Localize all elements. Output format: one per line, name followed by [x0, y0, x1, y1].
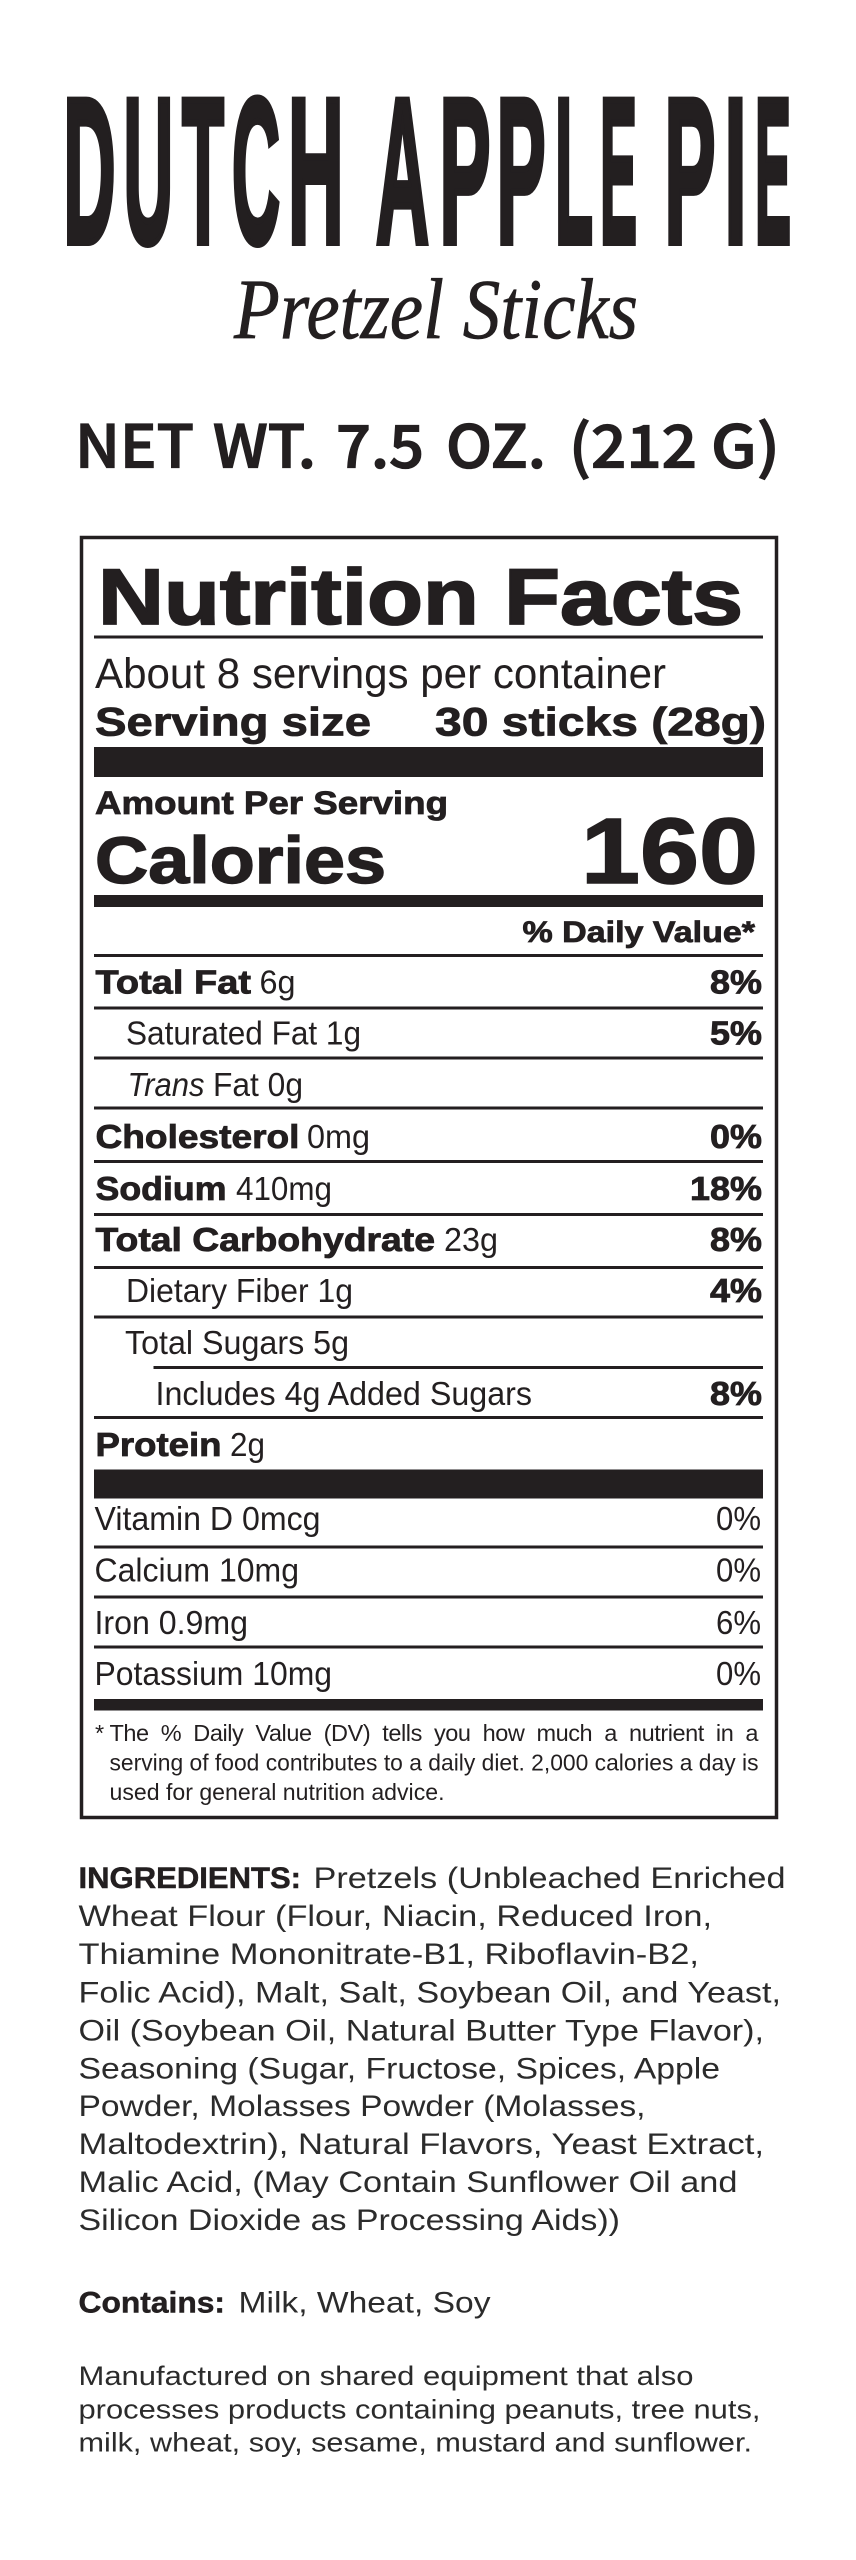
row: vitamin d: [94, 1500, 761, 1537]
footnote: serving of food contributes to a daily diet. 2,000 calories a day is: [110, 1750, 758, 1776]
row: iron: [94, 1604, 761, 1641]
contains allergens: Contains:: [78, 2286, 225, 2320]
row: saturated fat: Saturated Fat 1g: [126, 1014, 361, 1052]
row: iron: Iron 0.9mg: [94, 1604, 248, 1641]
ingredients: Seasoning (Sugar, Fructose, Spices, Apple: [78, 2052, 720, 2086]
net weight: G): [711, 400, 780, 484]
subtitle: Pretzel Sticks: Pretzel Sticks: [233, 261, 638, 357]
row: added sugars: [156, 1375, 762, 1412]
title: Dutch Apple Pie: A: [376, 56, 429, 286]
row: cholesterol: Cholesterol: [96, 1118, 300, 1155]
row: potassium: Potassium 10mg: [94, 1655, 332, 1692]
net weight: OZ.: [446, 400, 546, 484]
row: calcium: 0%: [716, 1552, 761, 1588]
row: saturated fat: [126, 1014, 762, 1052]
row: calcium: Calcium 10mg: [94, 1552, 299, 1588]
row: protein: Protein: [96, 1426, 222, 1463]
net weight: [75, 400, 780, 484]
contains allergens: [78, 2286, 490, 2320]
row: trans fat: Trans: [128, 1066, 204, 1103]
ingredients: Powder, Molasses Powder (Molasses,: [78, 2090, 646, 2123]
title: Dutch Apple Pie: D: [63, 56, 116, 286]
amount per serving: Amount Per Serving: [95, 785, 448, 821]
row: sodium: Sodium: [96, 1170, 226, 1207]
row: dietary fiber: [126, 1272, 762, 1309]
heading: nutrition facts: Nutrition Facts: [98, 552, 743, 641]
title: Dutch Apple Pie: P: [440, 56, 490, 286]
serving size: Serving size: [95, 700, 371, 744]
title: Dutch Apple Pie: I: [724, 56, 746, 286]
shared equipment statement: [78, 2361, 760, 2458]
ingredients: INGREDIENTS:: [78, 1862, 301, 1895]
footnote: [95, 1720, 759, 1805]
row: total carbohydrate: 8%: [710, 1221, 762, 1258]
row: sodium: 410mg: [236, 1170, 332, 1207]
row: total fat: 6g: [260, 964, 296, 1000]
row: protein: 2g: [230, 1426, 265, 1463]
shared equipment statement: milk, wheat, soy, sesame, mustard and sunflower.: [78, 2428, 752, 2458]
calories: Calories: [95, 823, 386, 897]
row: iron: 6%: [716, 1604, 761, 1641]
title: Dutch Apple Pie: U: [124, 56, 173, 286]
title: Dutch Apple Pie: E: [600, 56, 637, 286]
row: potassium: [94, 1655, 761, 1692]
serving size: 30 sticks (28g): [435, 700, 766, 744]
percent daily value header: % Daily Value*: [522, 916, 755, 949]
title: Dutch Apple Pie: H: [288, 56, 344, 286]
row: total fat: [96, 964, 762, 1000]
row: added sugars: Includes 4g Added Sugars: [156, 1375, 532, 1412]
row: total fat: 8%: [710, 964, 762, 1000]
ingredients: [78, 1862, 786, 2237]
footnote: *: [95, 1720, 104, 1746]
row: cholesterol: 0mg: [307, 1118, 370, 1155]
row: trans fat: [128, 1066, 303, 1103]
row: sodium: 18%: [690, 1170, 762, 1207]
row: dietary fiber: 4%: [710, 1272, 762, 1309]
ingredients: Oil (Soybean Oil, Natural Butter Type Flavor),: [78, 2014, 764, 2048]
row: total carbohydrate: Total Carbohydrate: [96, 1221, 435, 1258]
calories: 160: [581, 799, 758, 903]
row: total fat: Total Fat: [96, 964, 251, 1000]
ingredients: Folic Acid), Malt, Salt, Soybean Oil, and Yeast,: [78, 1976, 781, 2010]
net weight: (212: [569, 400, 697, 484]
ingredients: Malic Acid, (May Contain Sunflower Oil and: [78, 2166, 738, 2199]
row: total carbohydrate: [96, 1221, 762, 1258]
title: Dutch Apple Pie: P: [497, 56, 546, 286]
row: total carbohydrate: 23g: [444, 1221, 498, 1258]
row: vitamin d: Vitamin D 0mcg: [94, 1500, 320, 1537]
ingredients: Pretzels (Unbleached Enriched: [314, 1862, 786, 1895]
row: protein: [96, 1426, 265, 1463]
calories: [95, 799, 758, 903]
shared equipment statement: Manufactured on shared equipment that also: [78, 2361, 694, 2391]
footnote: The % Daily Value (DV) tells you how much a nutrient in a: [110, 1720, 759, 1746]
row: vitamin d: 0%: [716, 1500, 761, 1537]
row: cholesterol: 0%: [710, 1118, 762, 1155]
shared equipment statement: processes products containing peanuts, tree nuts,: [78, 2394, 760, 2424]
net weight: 7.5: [336, 400, 424, 484]
title: Dutch Apple Pie: T: [182, 56, 224, 286]
net weight: NET: [75, 400, 194, 484]
row: total sugars: Total Sugars 5g: [125, 1324, 349, 1361]
ingredients: Wheat Flour (Flour, Niacin, Reduced Iron,: [78, 1900, 712, 1933]
net weight: WT.: [213, 400, 316, 484]
footnote: used for general nutrition advice.: [110, 1779, 444, 1805]
contains allergens: Milk, Wheat, Soy: [238, 2286, 490, 2320]
panel: nutrition facts: [82, 538, 776, 1818]
row: calcium: [94, 1552, 761, 1588]
row: saturated fat: 5%: [710, 1014, 762, 1052]
row: trans fat: Fat 0g: [213, 1066, 303, 1103]
row: dietary fiber: Dietary Fiber 1g: [126, 1272, 353, 1309]
ingredients: Maltodextrin), Natural Flavors, Yeast Extract,: [78, 2128, 764, 2161]
title: Dutch Apple Pie: P: [664, 56, 716, 286]
row: added sugars: 8%: [710, 1375, 762, 1412]
servings per container: About 8 servings per container: [95, 650, 666, 698]
title: Dutch Apple Pie: L: [555, 56, 593, 286]
ingredients: Silicon Dioxide as Processing Aids)): [78, 2204, 620, 2237]
title: Dutch Apple Pie: C: [232, 56, 280, 286]
row: sodium: [96, 1170, 762, 1207]
ingredients: Thiamine Mononitrate-B1, Riboflavin-B2,: [78, 1938, 699, 1971]
row: potassium: 0%: [716, 1655, 761, 1692]
row: cholesterol: [96, 1118, 762, 1155]
serving size: [95, 700, 766, 744]
